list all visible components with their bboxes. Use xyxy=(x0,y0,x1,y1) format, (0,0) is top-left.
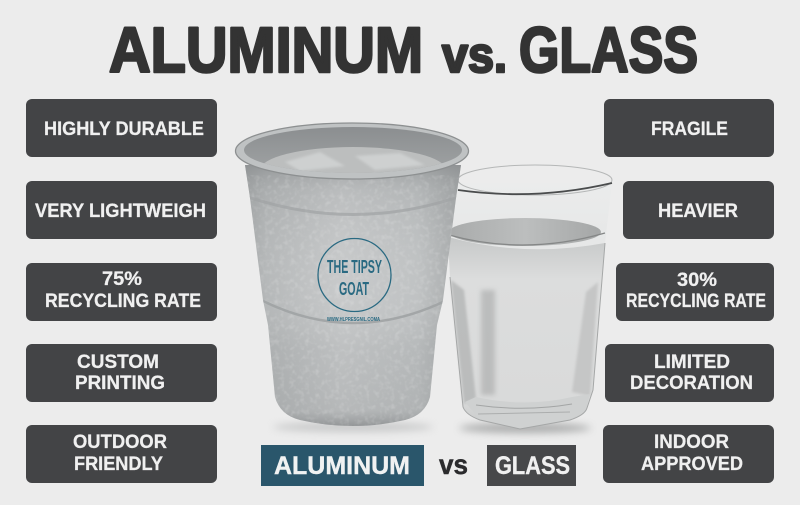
label: indoor approved: INDOOR xyxy=(654,432,729,453)
label: limited decoration: DECORATION xyxy=(630,373,753,394)
label: 75% recycling rate: RECYCLING RATE xyxy=(45,291,201,312)
glass side facets xyxy=(451,280,598,404)
title xyxy=(109,14,698,86)
label: outdoor friendly: FRIENDLY xyxy=(74,454,163,475)
label: custom printing: PRINTING xyxy=(75,373,165,394)
label: 30% recycling rate: 30% xyxy=(677,270,717,291)
label: indoor approved: APPROVED xyxy=(641,454,743,475)
legend: aluminum xyxy=(261,445,424,486)
title: GLASS xyxy=(519,14,698,86)
label: indoor approved xyxy=(603,425,774,483)
label: fragile: FRAGILE xyxy=(651,119,728,140)
label: custom printing xyxy=(26,344,217,402)
label: very lightweight: VERY LIGHTWEIGH xyxy=(35,201,206,222)
label: highly durable: HIGHLY DURABLE xyxy=(44,119,204,140)
legend: aluminum: ALUMINUM xyxy=(274,452,410,480)
label: outdoor friendly xyxy=(26,425,217,483)
logo: the tipsy goat: GOAT xyxy=(339,279,369,299)
label: highly durable xyxy=(26,99,217,157)
label: 75% recycling rate: 75% xyxy=(102,269,142,290)
label: limited decoration: LIMITED xyxy=(654,352,730,373)
label: very lightweight xyxy=(26,181,217,239)
legend: glass: GLASS xyxy=(495,452,570,480)
label: limited decoration xyxy=(605,344,774,402)
label: 30% recycling rate: RECYCLING RATE xyxy=(626,291,766,312)
label: heavier xyxy=(623,181,774,239)
illustration: aluminum cup xyxy=(236,123,468,432)
title: ALUMINUM xyxy=(109,14,423,86)
logo: the tipsy goat: WWW.HLPRESGNIL.COMA xyxy=(327,317,380,323)
logo: the tipsy goat: THE TIPSY xyxy=(327,257,382,277)
label: 75% recycling rate xyxy=(26,263,217,321)
label: custom printing: CUSTOM xyxy=(77,352,159,373)
label: 30% recycling rate xyxy=(616,263,774,321)
logo: the tipsy goat xyxy=(318,238,391,323)
panel: aluminum benefits xyxy=(26,99,217,483)
label: outdoor friendly: OUTDOOR xyxy=(73,432,167,453)
legend: glass xyxy=(487,445,576,486)
title: vs. xyxy=(442,27,507,83)
illustration: glass of water xyxy=(446,165,612,433)
panel: glass drawbacks xyxy=(603,99,774,483)
label: heavier: HEAVIER xyxy=(658,201,738,222)
legend: vs: vs xyxy=(439,449,468,480)
label: fragile xyxy=(604,99,774,157)
